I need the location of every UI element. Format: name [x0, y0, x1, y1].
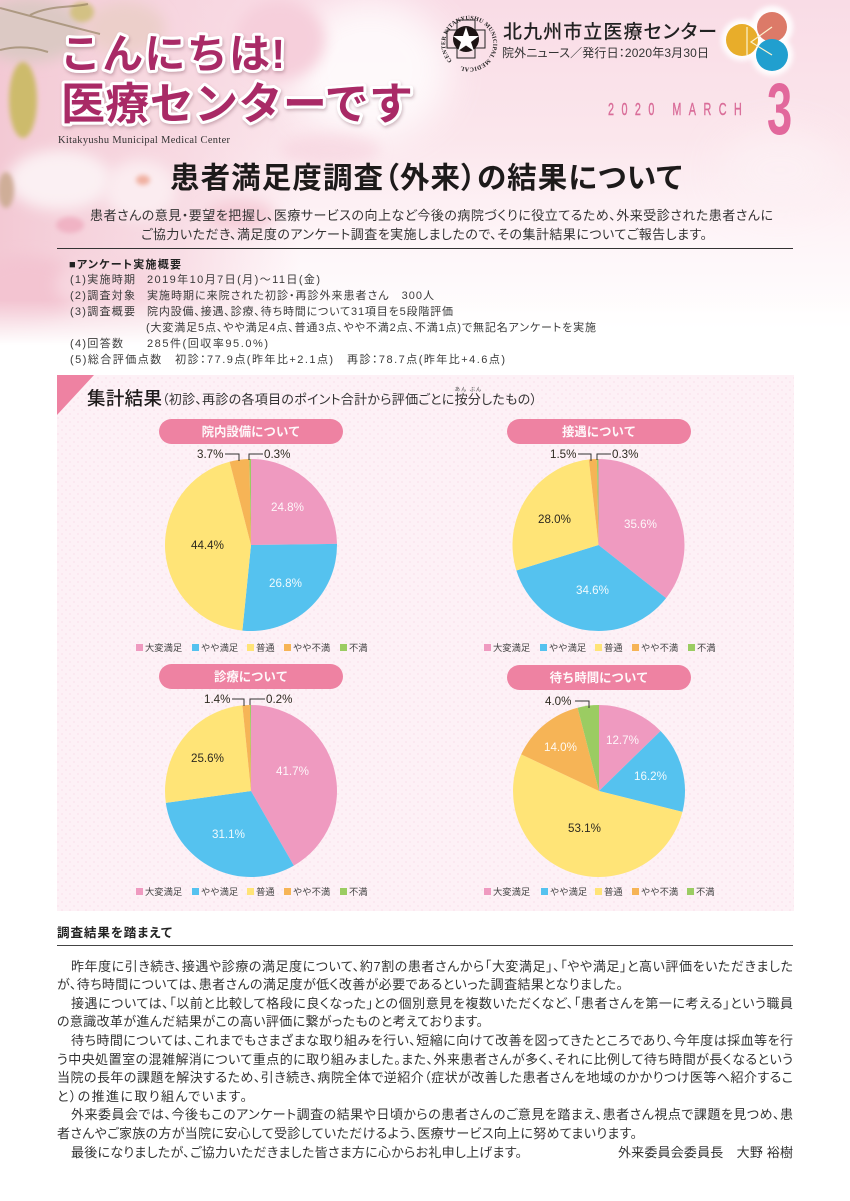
conclusion body text: の意識改革が進んだ結果がこの高い評価に繋がったものと考えております。 [57, 1014, 483, 1029]
chart: 待ち時間について: 大変満足 [493, 886, 530, 897]
chart: 院内設備について: 普通 [256, 642, 275, 653]
conclusion body text: 者さんやご家族の方が当院に安心して受診していただけるよう、医療サービス向上に努めてまいります。 [57, 1126, 637, 1141]
chart: 院内設備について: 24.8% [271, 501, 304, 514]
chart: 診療について: やや満足 [201, 887, 238, 897]
chart: 院内設備について: やや不満 [293, 643, 330, 653]
survey overview: (2)調査対象 [70, 288, 135, 302]
results subheading: （初診、再診の各項目のポイント合計から評価ごとに按分したもの） [162, 392, 537, 407]
background: cherry blossom photo [0, 0, 850, 345]
conclusion body text: が、待ち時間については、患者さんの満足度が低く改善が必要であるといった調査結果となりました。 [57, 977, 623, 992]
chart: 接遇について: 普通 [604, 642, 623, 653]
chart: 院内設備について: 大変満足 [145, 642, 182, 653]
chart: 接遇について: 0.3% [612, 448, 638, 461]
chart: 待ち時間について: やや満足 [550, 887, 587, 897]
chart: 接遇について: やや不満 [641, 643, 678, 653]
chart: 診療について: 1.4% [204, 693, 230, 706]
title: こんにちは!医療センターです: 医療センターです [61, 80, 413, 129]
chart: 診療について: やや不満 [293, 887, 330, 897]
conclusion body text: 外来委員会では、今後もこのアンケート調査の結果や日頃からの患者さんのご意見を踏まえ、患者さん視点で課題を見つめ、患 [71, 1107, 793, 1122]
intro text [90, 208, 773, 242]
english subtitle: Kitakyushu Municipal Medical Center [58, 135, 231, 146]
survey overview: 2019年10月7日(月)～11日(金) [147, 272, 320, 286]
chart: 診療について: 診療について [214, 669, 288, 684]
chart: 診療について: 大変満足 [145, 886, 182, 897]
survey overview: (5)総合評価点数 初診：77.9点(昨年比+2.1点) 再診：78.7点(昨年比+4.6点) [70, 352, 505, 366]
chart: 待ち時間について: やや不満 [641, 887, 678, 897]
conclusion body text: 待ち時間については、これまでもさまざまな取り組みを行い、短縮に向けて改善を図ってきたところであり、今年度は採血等を行 [71, 1033, 793, 1048]
panel: results [57, 375, 794, 911]
survey overview: (4)回答数 [70, 336, 123, 350]
chart: 接遇について: 不満 [697, 643, 716, 653]
chart: 院内設備について: 44.4% [191, 539, 224, 552]
chart: 待ち時間について [484, 665, 715, 897]
chart: 接遇について: やや満足 [549, 643, 586, 653]
survey overview: 実施時期に来院された初診・再診外来患者さん 300人 [147, 288, 434, 302]
conclusion body text: 昨年度に引き続き、接遇や診療の満足度について、約7割の患者さんから「大変満足」、「やや満足」と高い評価をいただきました [71, 959, 793, 974]
conclusion body text: 外来委員会委員長 大野 裕樹 [618, 1145, 793, 1160]
chart: 診療について: 0.2% [266, 693, 292, 706]
chart: 院内設備について: 不満 [349, 643, 368, 653]
chart: 接遇について: 35.6% [624, 518, 657, 531]
survey overview [69, 257, 596, 366]
chart: 接遇について: 1.5% [550, 448, 576, 461]
results subheading: あん ぶん [455, 386, 481, 393]
newsletter issue line: 院外ニュース／発行日：2020年3月30日 [502, 46, 709, 60]
chart: 院内設備について: やや満足 [201, 643, 238, 653]
chart: 診療について: 不満 [349, 887, 368, 897]
intro text: ご協力いただき、満足度のアンケート調査を実施しましたので、その集計結果についてご報告します。 [141, 227, 707, 242]
chart: 接遇について: 28.0% [538, 513, 571, 526]
chart: 待ち時間について: 12.7% [606, 734, 639, 747]
chart: 診療について: 25.6% [191, 752, 224, 765]
chart: 待ち時間について: 4.0% [545, 695, 571, 708]
survey overview: (1)実施時期 [70, 273, 135, 286]
chart: 診療について [136, 664, 368, 897]
title: こんにちは!医療センターです [60, 31, 413, 129]
chart: 待ち時間について: 不満 [696, 887, 715, 897]
chart: 待ち時間について: 53.1% [568, 822, 601, 835]
conclusion heading: 調査結果を踏まえて [57, 925, 172, 940]
chart: 院内設備について: 26.8% [269, 577, 302, 590]
chart: 待ち時間について: 14.0% [544, 741, 577, 754]
chart: 接遇について: 34.6% [576, 584, 609, 597]
chart: 診療について: 普通 [256, 886, 275, 897]
results heading: 集計結果 [87, 388, 162, 409]
chart: 接遇について [484, 419, 716, 653]
title: こんにちは!医療センターです: こんにちは! [60, 31, 285, 77]
conclusion body text: と）の推進に取り組んでいます。 [57, 1089, 247, 1104]
chart: 院内設備について: 3.7% [197, 448, 223, 461]
chart: 院内設備について [136, 419, 368, 653]
hospital emblem: CENTER KITAKYUSHU MUNICIPAL MEDICAL [441, 16, 498, 72]
survey overview: (3)調査概要 [70, 304, 135, 318]
survey overview: (大変満足5点、やや満足4点、普通3点、やや不満2点、不満1点)で無記名アンケートを実施 [146, 320, 596, 334]
intro text: 患者さんの意見・要望を把握し、医療サービスの向上など今後の病院づくりに役立てるため、外来受診された患者さんに [90, 208, 773, 223]
K logo [721, 6, 793, 76]
main heading: 患者満足度調査（外来）の結果について [170, 162, 682, 195]
issue date: 2020 MARCH [608, 100, 742, 120]
survey overview: ■アンケート実施概要 [69, 257, 181, 271]
conclusion body text: う中央処置室の混雑解消について重点的に取り組みました。また、外来患者さんが多く、それに比例して待ち時間が長くなるという [57, 1052, 793, 1067]
chart: 接遇について: 大変満足 [493, 642, 530, 653]
issue number 3: 3 [767, 68, 792, 150]
survey overview: 285件(回収率95.0%) [147, 337, 268, 350]
chart: 診療について: 31.1% [212, 828, 245, 841]
conclusion body text [57, 959, 793, 1160]
chart: 診療について: 41.7% [276, 765, 309, 778]
chart: 接遇について: 接遇について [562, 424, 636, 439]
chart: 院内設備について: 0.3% [264, 448, 290, 461]
hospital name: 北九州市立医療センター [503, 21, 717, 43]
survey overview: 院内設備、接遇、診療、待ち時間について31項目を5段階評価 [147, 304, 453, 318]
conclusion body text: 最後になりましたが、ご協力いただきました皆さま方に心からお礼申し上げます。 [71, 1145, 522, 1160]
conclusion body text: 接遇については、「以前と比較して格段に良くなった」との個別意見を複数いただくなど、「患者さんを第一に考える」という職員 [71, 996, 793, 1011]
chart: 待ち時間について: 待ち時間について [550, 670, 648, 685]
chart: 待ち時間について: 普通 [604, 886, 623, 897]
chart: 待ち時間について: 16.2% [634, 770, 667, 783]
chart: 院内設備について: 院内設備について [202, 424, 300, 439]
conclusion body text: 当院の長年の課題を解決するため、引き続き、病院全体で逆紹介（症状が改善した患者さんを地域のかかりつけ医等へ紹介するこ [57, 1070, 793, 1085]
